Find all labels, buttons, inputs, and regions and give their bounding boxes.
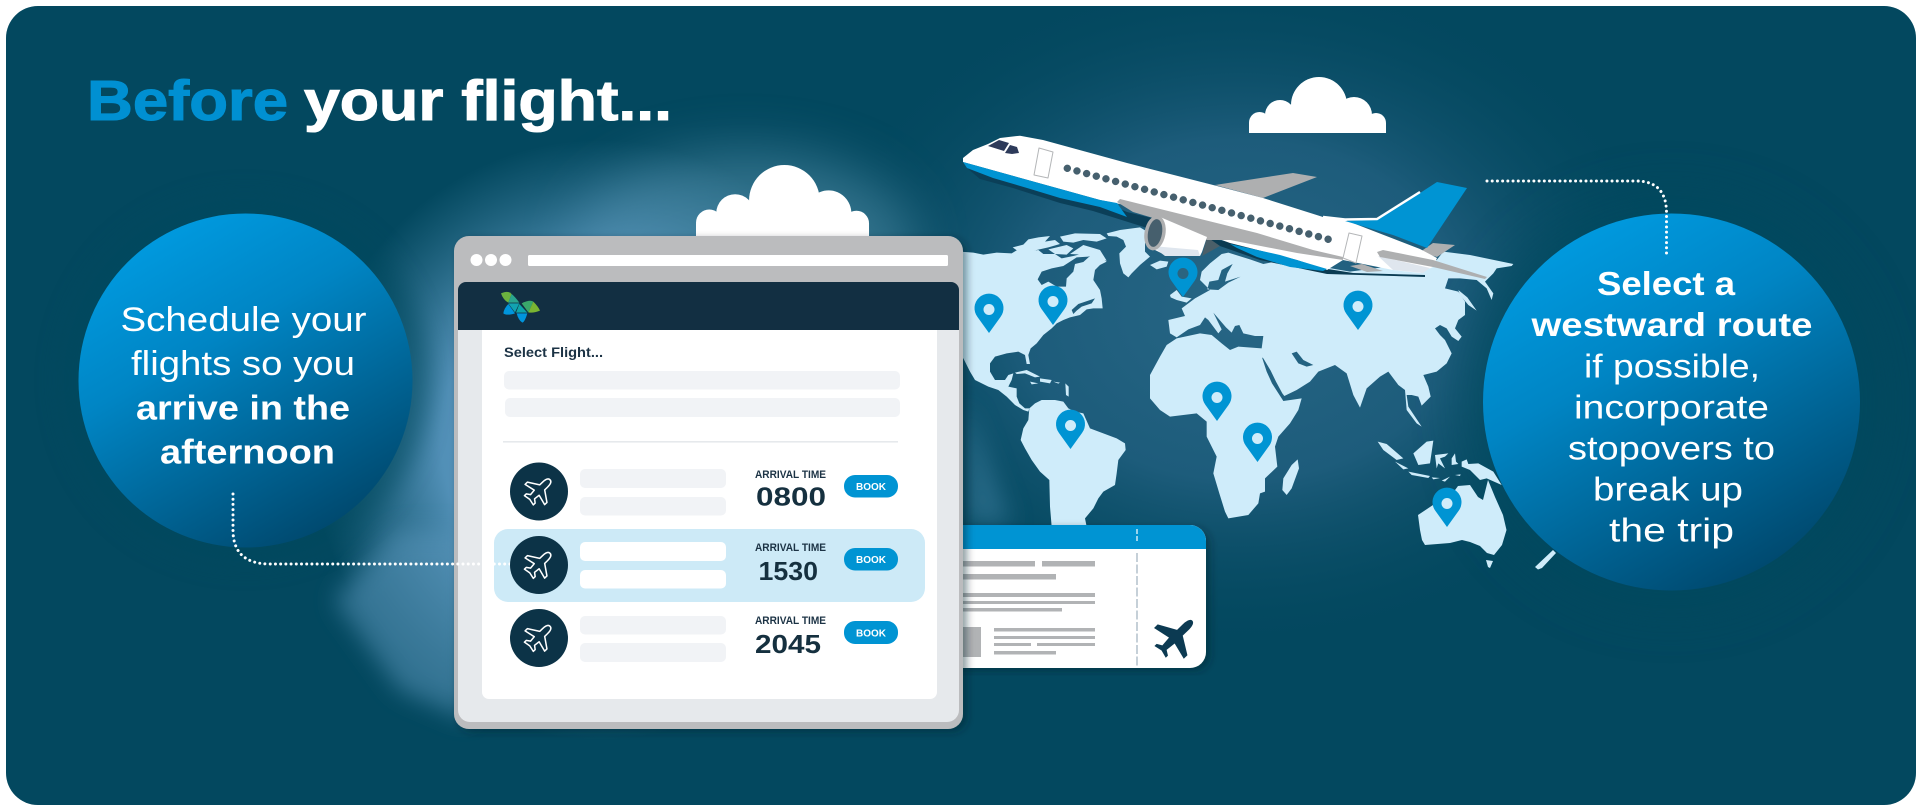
book buttons: BOOK <box>856 481 886 493</box>
row placeholders <box>580 469 726 662</box>
map: Eurasia and Africa <box>1150 252 1513 518</box>
title: Before <box>87 69 288 133</box>
book buttons: BOOK <box>856 554 886 566</box>
pin: Australia <box>1432 488 1462 527</box>
arrival times: 1530 <box>758 556 818 586</box>
arrival times: 2045 <box>755 629 821 659</box>
airplane <box>963 136 1487 279</box>
pin: West Africa <box>1202 382 1232 421</box>
book buttons <box>844 475 898 644</box>
search fields <box>504 371 900 417</box>
flight icons <box>510 462 568 667</box>
left connector dotted line <box>233 494 510 564</box>
browser window <box>454 236 963 729</box>
pin: East Africa <box>1243 423 1272 462</box>
arrival time labels: ARRIVAL TIME <box>755 615 826 627</box>
arrival times: 0800 <box>756 482 826 512</box>
content sheet <box>482 330 937 699</box>
map pins <box>974 258 1462 527</box>
right connector dotted line <box>1487 181 1666 254</box>
callout: arrival time advice: arrive in the <box>136 390 350 428</box>
cloud: behind browser <box>696 165 869 236</box>
boarding pass <box>940 525 1206 668</box>
callout: arrival time advice: flights so you <box>131 345 355 383</box>
arrival times <box>755 482 826 659</box>
cloud: top right <box>1249 77 1386 133</box>
flight row highlight <box>494 529 925 602</box>
map: Australia and New Zealand <box>1418 480 1556 570</box>
logo <box>501 292 540 323</box>
title: your flight... <box>304 69 672 133</box>
icon: flight 0800 <box>510 462 568 520</box>
browser body <box>458 330 959 722</box>
site header <box>458 282 959 330</box>
boarding pass details <box>960 529 1137 668</box>
heading: select flight: Select Flight... <box>504 344 603 360</box>
title <box>87 69 672 133</box>
pin: South America <box>1056 410 1085 449</box>
callout: westward route advice: westward route <box>1530 306 1812 343</box>
icon: flight 2045 <box>510 609 568 667</box>
arrival time labels <box>755 469 826 627</box>
browser frame <box>454 236 963 729</box>
world map <box>960 227 1556 570</box>
callout: arrival time advice: afternoon <box>160 434 335 472</box>
browser dots <box>470 254 512 266</box>
arrival time labels: ARRIVAL TIME <box>755 469 826 481</box>
map: Americas and Atlantic islands <box>960 227 1192 527</box>
callout: arrival time advice <box>78 214 412 548</box>
callout: arrival time advice: Schedule your <box>120 301 366 339</box>
pin: western North America <box>974 294 1004 333</box>
address bar <box>528 255 948 266</box>
callout: westward route advice: break up <box>1593 470 1743 508</box>
pin: Russia <box>1344 291 1372 330</box>
icon: boarding pass plane <box>1145 605 1207 667</box>
arrival time labels: ARRIVAL TIME <box>755 542 826 554</box>
callout: westward route advice: the trip <box>1609 512 1734 548</box>
icon: flight 1530 <box>510 536 568 594</box>
callout: westward route advice <box>1483 214 1860 590</box>
book buttons: BOOK <box>856 628 886 640</box>
callout: westward route advice: if possible, <box>1584 348 1760 384</box>
pin: eastern North America <box>1038 286 1068 325</box>
callout: westward route advice: Select a <box>1597 265 1736 302</box>
callout: westward route advice: stopovers to <box>1568 430 1775 466</box>
callout: westward route advice: incorporate <box>1574 388 1769 426</box>
pin: United Kingdom <box>1168 258 1198 297</box>
